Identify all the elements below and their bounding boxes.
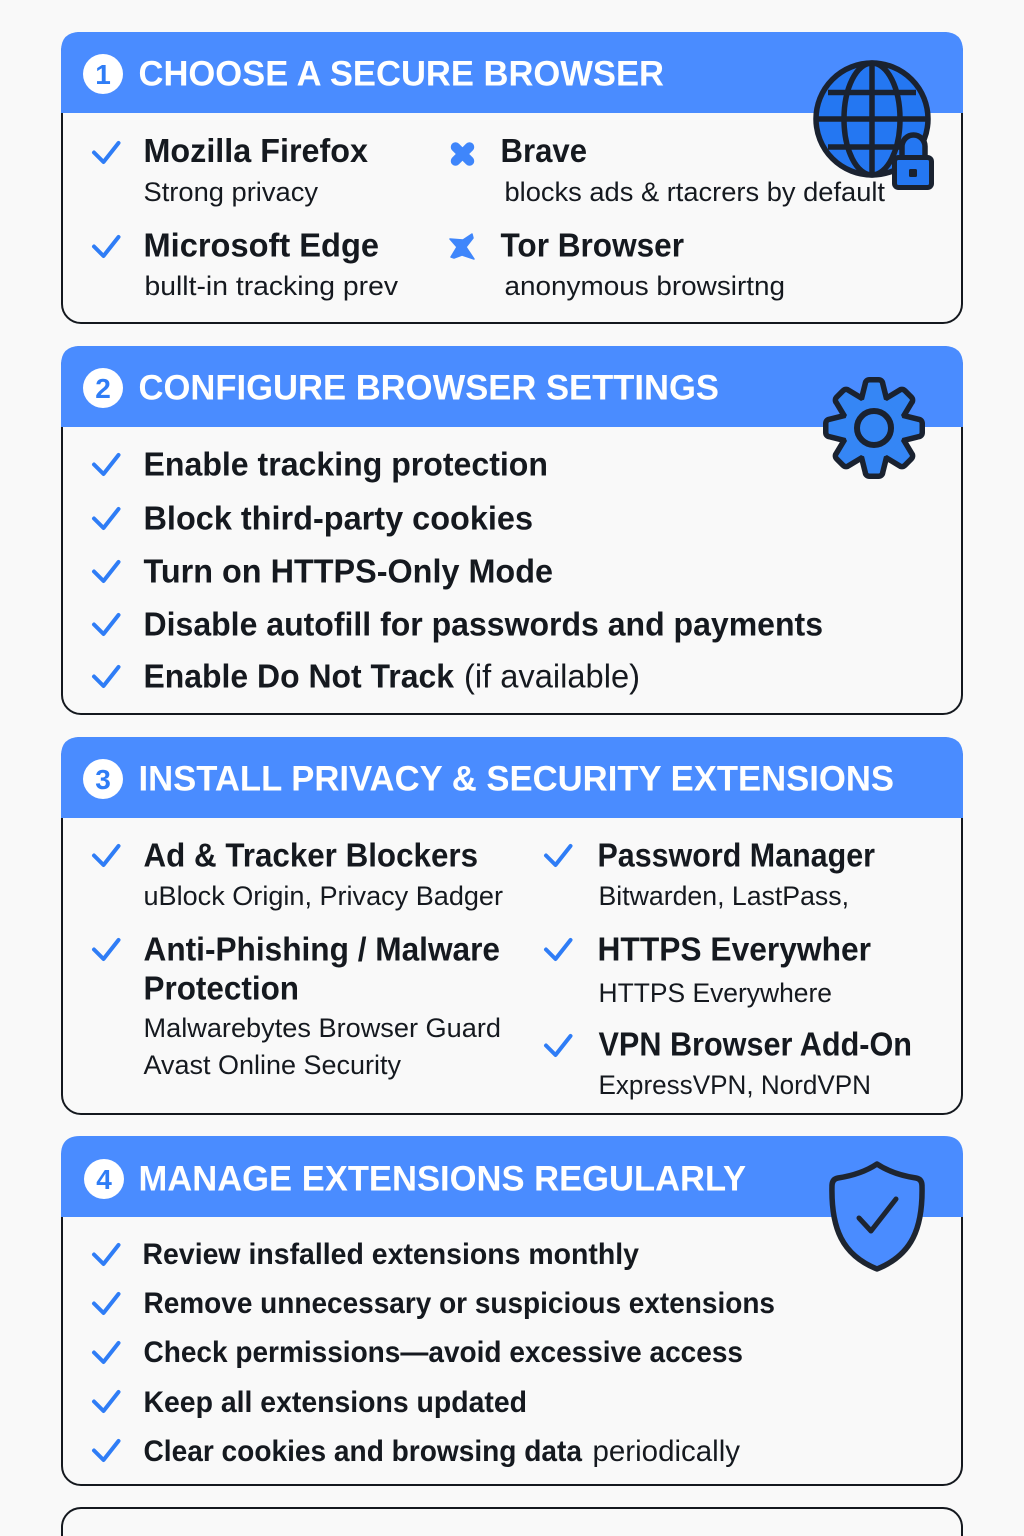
item: Anti-Phishing / Malware Protection: Malwarebytes Browser Guard	[144, 1013, 501, 1043]
item: Anti-Phishing / Malware Protection: Protection	[144, 970, 299, 1006]
item: Brave	[456, 132, 886, 207]
item: Mozilla Firefox	[94, 132, 369, 207]
item: Check permissions: Check permissions—avoid excessive access	[144, 1336, 743, 1369]
item: Anti-Phishing / Malware Protection	[94, 930, 501, 1080]
item: VPN Browser Add-On	[546, 1026, 912, 1100]
number badge 4: 4	[96, 1164, 112, 1195]
item: Mozilla Firefox: Strong privacy	[144, 177, 319, 207]
number badge 3: 3	[95, 764, 111, 795]
panel 3: install privacy and security extensions	[61, 737, 963, 1114]
item: Microsoft Edge: Microsoft Edge	[144, 226, 379, 264]
item: Brave: blocks ads & rtacrers by default	[504, 177, 886, 207]
panel 1 outline	[62, 33, 962, 323]
panel 2 outline	[62, 347, 962, 714]
item: Enable Do Not Track: (if available)	[464, 658, 640, 694]
panel 4 header band	[61, 1136, 963, 1217]
item: Brave: Brave	[500, 132, 587, 169]
item: Anti-Phishing / Malware Protection: Anti-Phishing / Malware	[144, 930, 500, 968]
item: Remove unnecessary extensions: Remove unnecessary or suspicious extensions	[144, 1287, 775, 1320]
panel 1 header band	[61, 32, 963, 113]
item: VPN Browser Add-On: ExpressVPN, NordVPN	[598, 1070, 871, 1100]
heading 1: CHOOSE A SECURE BROWSER	[138, 54, 664, 94]
number badge 1	[83, 54, 123, 94]
item: Mozilla Firefox: Mozilla Firefox	[144, 132, 369, 169]
panel 3 header band	[61, 737, 963, 818]
item: Ad and Tracker Blockers: Ad & Tracker Blockers	[144, 836, 478, 874]
icon: settings gear	[828, 382, 920, 474]
item: Tor Browser: Tor Browser	[500, 226, 684, 264]
number badge 2	[83, 368, 123, 408]
item: Enable Do Not Track	[94, 658, 640, 694]
item: VPN Browser Add-On: VPN Browser Add-On	[598, 1026, 912, 1062]
number badge 1: 1	[95, 59, 111, 90]
item: Disable autofill: Disable autofill for passwords and payments	[144, 606, 823, 642]
item: Microsoft Edge	[94, 226, 399, 301]
heading 4: MANAGE EXTENSIONS REGULARLY	[138, 1160, 746, 1198]
item: HTTPS Everywhere	[546, 930, 871, 1008]
number badge 3	[83, 759, 123, 799]
item: Ad and Tracker Blockers: uBlock Origin, Privacy Badger	[144, 881, 503, 911]
item: Password Manager: Password Manager	[598, 836, 875, 874]
item: HTTPS Everywhere: HTTPS Everywhere	[598, 978, 832, 1008]
icon: globe with padlock	[816, 63, 932, 188]
item: Keep extensions updated: Keep all extensions updated	[144, 1386, 527, 1419]
item: Block third-party cookies: Block third-party cookies	[144, 500, 533, 536]
item: Enable tracking protection: Enable tracking protection	[144, 446, 548, 482]
item: Microsoft Edge: bullt-in tracking prev	[144, 271, 399, 301]
panel 3 outline	[62, 738, 962, 1114]
panel 4: manage extensions regularly	[61, 1136, 963, 1485]
item: Tor Browser	[450, 226, 785, 301]
number badge 2: 2	[95, 373, 111, 404]
panel 2: configure browser settings	[61, 346, 963, 714]
heading 3: INSTALL PRIVACY & SECURITY EXTENSIONS	[138, 760, 894, 798]
item: Clear cookies: Clear cookies and browsing data	[144, 1435, 582, 1468]
item: HTTPS Everywhere: HTTPS Everywher	[598, 930, 871, 968]
item: Enable Do Not Track: Enable Do Not Track	[144, 658, 455, 694]
item: Tor Browser: anonymous browsirtng	[504, 271, 785, 301]
heading 2: CONFIGURE BROWSER SETTINGS	[138, 368, 719, 408]
panel 2 header band	[61, 346, 963, 427]
item: Ad and Tracker Blockers	[94, 836, 503, 911]
item: Review installed extensions: Review insfalled extensions monthly	[142, 1238, 639, 1271]
panel 4 outline	[62, 1138, 962, 1485]
item: Turn on HTTPS-Only Mode: Turn on HTTPS-Only Mode	[144, 552, 553, 590]
number badge 4	[84, 1159, 124, 1199]
item: Password Manager	[546, 836, 875, 911]
item: Anti-Phishing / Malware Protection: Avast Online Security	[144, 1050, 401, 1080]
item: Password Manager: Bitwarden, LastPass,	[598, 881, 849, 911]
panel 1: choose a secure browser	[61, 32, 963, 323]
item: Clear cookies: periodically	[592, 1435, 740, 1468]
icon: shield with check	[832, 1164, 922, 1269]
panel 5: cropped empty panel	[62, 1508, 962, 1536]
